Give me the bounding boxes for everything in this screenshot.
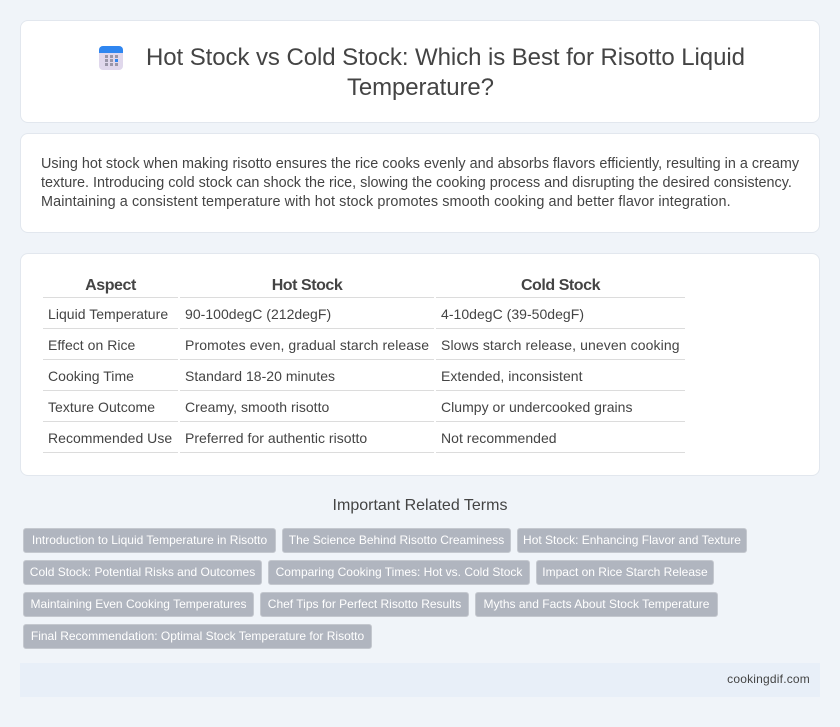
related term tags: Final Recommendation: Optimal Stock Temperature for Risotto <box>31 629 364 643</box>
footer bar <box>20 663 820 697</box>
related term tags <box>23 528 747 649</box>
intro paragraph: Maintaining a consistent temperature with hot stock promotes smooth cooking and better flavor integration. <box>41 194 731 210</box>
row lines <box>43 297 685 453</box>
comparison table: Standard 18-20 minutes <box>185 368 335 384</box>
comparison table: Aspect <box>85 277 136 294</box>
comparison table: Slows starch release, uneven cooking <box>441 337 680 353</box>
comparison table: Cooking Time <box>48 368 134 384</box>
comparison table: 90-100degC (212degF) <box>185 306 331 322</box>
comparison table: Not recommended <box>441 430 557 446</box>
related term tags: Comparing Cooking Times: Hot vs. Cold Stock <box>276 565 522 579</box>
intro paragraph <box>41 156 799 210</box>
comparison table: Effect on Rice <box>48 337 135 353</box>
comparison table: Promotes even, gradual starch release <box>185 337 429 353</box>
comparison table: Clumpy or undercooked grains <box>441 399 632 415</box>
footer source text: cookingdif.com <box>727 672 810 686</box>
panel: introduction text <box>20 133 820 233</box>
comparison table: Recommended Use <box>48 430 172 446</box>
comparison table: 4-10degC (39-50degF) <box>441 306 584 322</box>
related term tags: The Science Behind Risotto Creaminess <box>289 533 504 547</box>
related term tags: Introduction to Liquid Temperature in Risotto <box>32 533 267 547</box>
related term tags: Hot Stock: Enhancing Flavor and Texture <box>523 533 741 547</box>
panel: title header <box>20 20 820 123</box>
comparison table: Liquid Temperature <box>48 306 168 322</box>
related term tags: Cold Stock: Potential Risks and Outcomes <box>30 565 255 579</box>
comparison table: Extended, inconsistent <box>441 368 583 384</box>
comparison table: Hot Stock <box>272 277 342 294</box>
title <box>146 44 745 101</box>
table cells <box>48 306 680 446</box>
heading: related terms: Important Related Terms <box>333 497 507 514</box>
related term tags: Myths and Facts About Stock Temperature <box>484 597 709 611</box>
panel: comparison table <box>20 253 820 476</box>
intro paragraph: Using hot stock when making risotto ensures the rice cooks evenly and absorbs flavors efficiently, resulting in a creamy <box>41 156 799 172</box>
related term tags: Chef Tips for Perfect Risotto Results <box>268 597 461 611</box>
related term tags: Impact on Rice Starch Release <box>542 565 708 579</box>
comparison table <box>43 277 685 453</box>
comparison table: Creamy, smooth risotto <box>185 399 329 415</box>
column headers <box>85 277 600 294</box>
comparison table: Texture Outcome <box>48 399 155 415</box>
title: Temperature? <box>347 74 494 101</box>
icon: calendar <box>99 46 123 70</box>
related term tags: Maintaining Even Cooking Temperatures <box>31 597 246 611</box>
intro paragraph: texture. Introducing cold stock can shock the rice, slowing the cooking process and disrupting the desired consistency. <box>41 175 792 191</box>
title: Hot Stock vs Cold Stock: Which is Best for Risotto Liquid <box>146 44 745 71</box>
comparison table: Preferred for authentic risotto <box>185 430 367 446</box>
comparison table: Cold Stock <box>521 277 600 294</box>
